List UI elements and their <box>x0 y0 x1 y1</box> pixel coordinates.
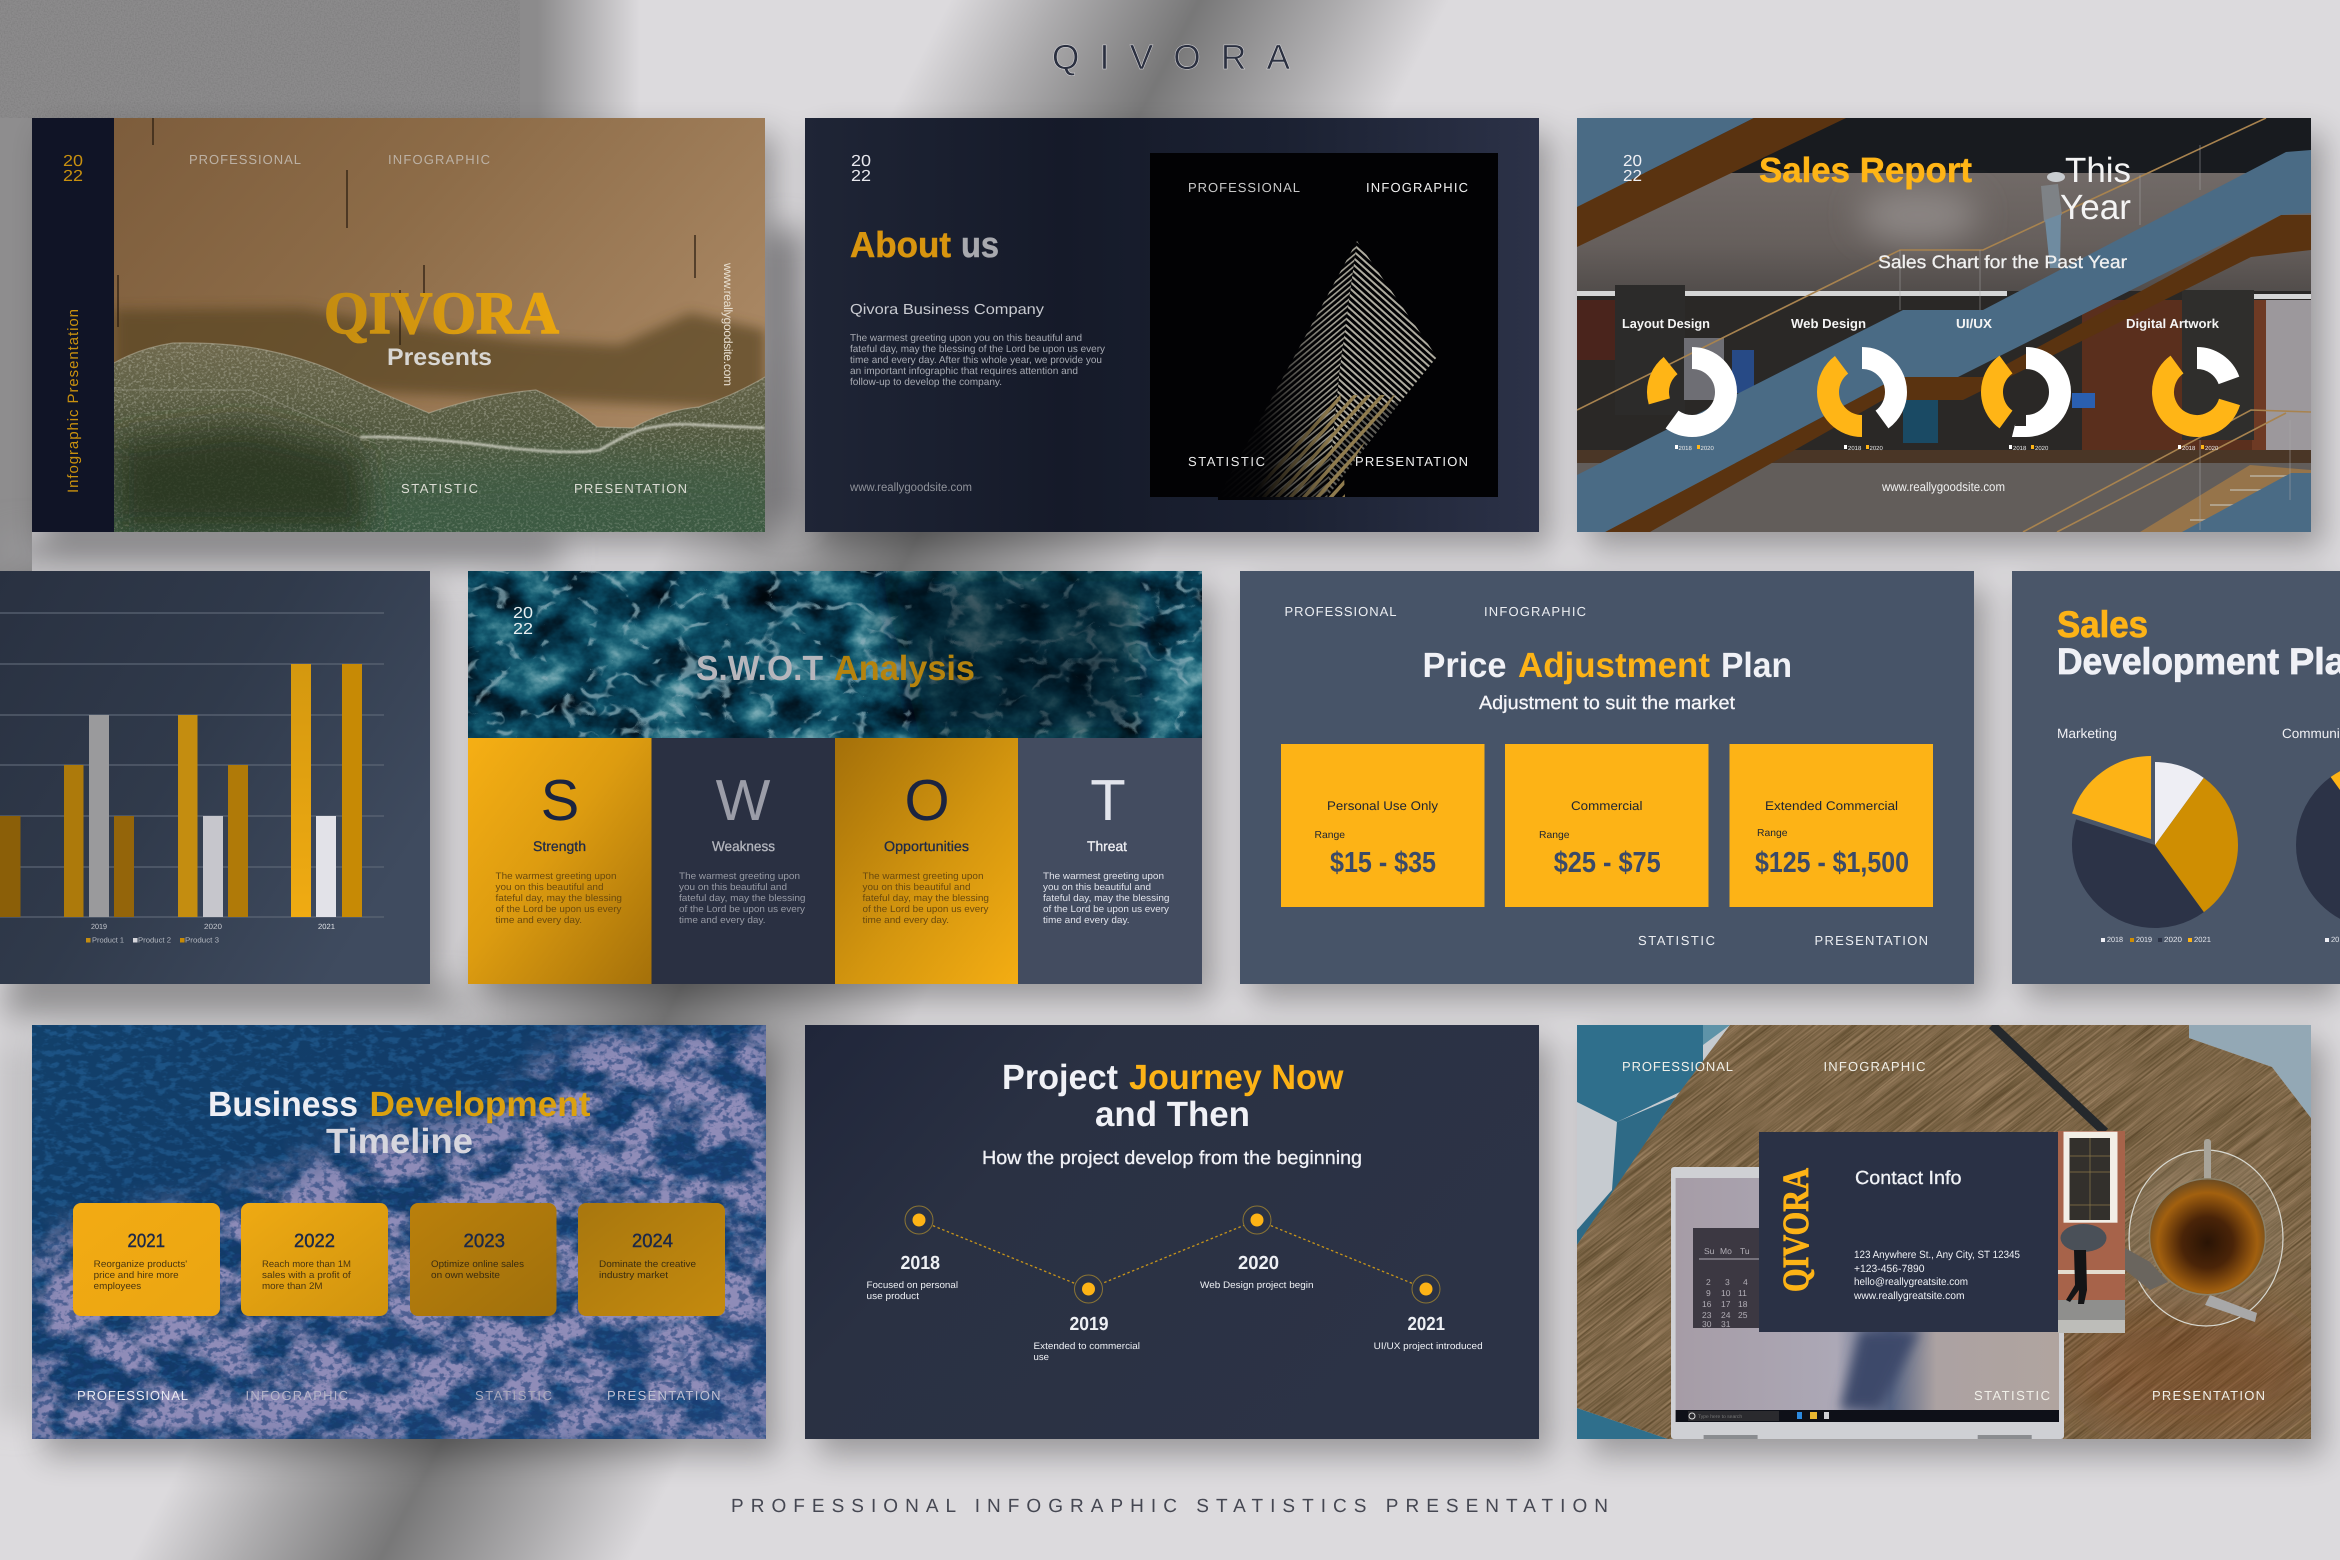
website: www.reallygoodsite.com <box>849 480 972 494</box>
swot labels <box>533 838 1127 854</box>
photo: desk with laptop and tea: 25 <box>1738 1310 1748 1320</box>
website: www.reallygoodsite.com <box>721 262 735 386</box>
pie chart: communication <box>2321 786 2340 904</box>
card: 2021: Reorganize products' <box>94 1259 187 1270</box>
panel labels: PROFESSIONAL <box>1188 180 1300 195</box>
heading <box>1422 646 1792 685</box>
slide: about us <box>805 118 1539 532</box>
heading <box>696 649 975 688</box>
labels: PRESENTATION <box>574 481 687 496</box>
photo panel: building <box>1150 153 1498 500</box>
milestone 2018: Focused on personal <box>866 1280 958 1291</box>
axis labels: 2020 <box>204 922 222 931</box>
heading <box>208 1085 591 1161</box>
photo: foamy ocean <box>32 1025 766 1439</box>
card: commercial <box>1505 744 1708 907</box>
slide background <box>805 118 1539 532</box>
swot letters: S <box>541 768 579 833</box>
slide: swot <box>468 571 1202 984</box>
swot body: opportunities: of the Lord be upon us every <box>862 904 989 915</box>
heading: Price <box>1422 646 1506 685</box>
year: 20 <box>63 153 83 170</box>
labels: STATISTIC <box>475 1388 552 1403</box>
slide background <box>805 1025 1539 1439</box>
contact details: 123 Anywhere St., Any City, ST 12345 <box>1854 1249 2020 1261</box>
swot body: threat: time and every day. <box>1043 915 1130 926</box>
heading <box>2057 604 2340 682</box>
body text: The warmest greeting upon you on this beautiful and <box>850 333 1082 344</box>
labels: PRESENTATION <box>607 1388 720 1403</box>
milestone 2019: use <box>1034 1352 1049 1363</box>
body text: follow-up to develop the company. <box>850 377 1002 388</box>
card: 2022 <box>241 1203 388 1316</box>
heading: Timeline <box>326 1122 473 1161</box>
swot body: threat: of the Lord be upon us every <box>1043 904 1169 915</box>
milestone 2018: use product <box>866 1291 919 1302</box>
swot body: weakness: you on this beautiful and <box>679 882 787 893</box>
contact heading: Contact Info <box>1855 1168 1962 1189</box>
donut legends: 2018 <box>2182 445 2196 452</box>
heading: Development <box>370 1085 591 1124</box>
heading: Analysis <box>834 649 975 688</box>
heading: Project <box>1002 1058 1118 1097</box>
card: 2023: on own website <box>431 1270 500 1281</box>
legend: Product 3 <box>185 936 219 944</box>
chart labels: Digital Artwork <box>2126 316 2220 331</box>
contact details: +123-456-7890 <box>1854 1263 1925 1275</box>
heading: Plan <box>1721 646 1792 685</box>
chart labels: Web Design <box>1791 316 1866 331</box>
top labels: INFOGRAPHIC <box>1484 604 1586 619</box>
year: 20 <box>513 605 533 622</box>
year <box>64 154 82 181</box>
slide: price plan <box>1240 571 1974 984</box>
swot body: threat: fateful day, may the blessing <box>1043 893 1170 904</box>
body text: an important infographic that requires attention and <box>850 366 1078 377</box>
labels: STATISTIC <box>401 481 478 496</box>
milestone 2018 <box>866 1253 958 1302</box>
body text <box>850 333 1105 388</box>
swot body: strength <box>496 871 622 926</box>
top labels <box>1284 604 1586 619</box>
photo: desk with laptop and tea: 17 <box>1721 1299 1731 1309</box>
bottom labels <box>1638 933 1928 948</box>
swot body: weakness: time and every day. <box>679 915 766 926</box>
heading: S.W.O.T <box>696 649 823 688</box>
contact details: www.reallygreatsite.com <box>1853 1290 1965 1302</box>
heading: Adjustment <box>1518 646 1710 685</box>
chart labels: UI/UX <box>1956 316 1992 331</box>
vertical subtitle: Infographic Presentation <box>65 309 82 493</box>
photo: desk with laptop and tea: Type here to search <box>1698 1414 1742 1420</box>
heading: Journey Now <box>1129 1058 1344 1097</box>
photo: desk with laptop and tea: 24 <box>1721 1310 1731 1320</box>
card: 2021: price and hire more <box>94 1270 179 1281</box>
labels: PRESENTATION <box>2152 1388 2265 1403</box>
heading <box>850 230 998 258</box>
card: 2021 <box>73 1203 220 1316</box>
year: 22 <box>1623 168 1642 185</box>
photo: desk with laptop and tea: 9 <box>1706 1288 1711 1298</box>
pie legend: 2020 <box>2164 935 2182 944</box>
axis labels: 2021 <box>318 922 335 931</box>
swot body: threat: you on this beautiful and <box>1043 882 1151 893</box>
labels: INFOGRAPHIC <box>1824 1059 1926 1074</box>
card: personal: Personal Use Only <box>1327 799 1439 813</box>
title: QIVORA <box>1052 38 1291 77</box>
contact details <box>1853 1249 2020 1302</box>
bottom labels: STATISTIC <box>1638 933 1715 948</box>
labels: PROFESSIONAL <box>77 1388 188 1403</box>
slide background <box>1240 571 1974 984</box>
card: 2023: Optimize online sales <box>431 1259 524 1270</box>
labels: PROFESSIONAL <box>189 152 301 167</box>
photo: desk with laptop and tea: Mo <box>1720 1246 1732 1256</box>
card: personal <box>1281 744 1484 907</box>
chart label: marketing: Marketing <box>2057 726 2117 741</box>
company name: Qivora Business Company <box>850 302 1045 318</box>
donut legends: 2020 <box>2035 445 2049 452</box>
donut charts <box>1650 345 2239 439</box>
pie legend: 2018 <box>2107 935 2123 944</box>
year: 22 <box>63 168 83 185</box>
card: 2021: 2021 <box>128 1231 165 1252</box>
photo: desk with laptop and tea: 2 <box>1706 1277 1711 1287</box>
card: personal: $15 - $35 <box>1330 847 1436 879</box>
donut legends: 2020 <box>1700 445 1715 452</box>
milestone 2020: Web Design project begin <box>1200 1280 1314 1291</box>
labels: STATISTIC <box>1974 1388 2050 1403</box>
pie legend: 2019 <box>2136 935 2152 944</box>
subheading: Presents <box>387 344 492 371</box>
photo: aerial beach <box>114 118 765 532</box>
axis labels: 2019 <box>91 922 107 931</box>
slide: timeline <box>32 1025 766 1439</box>
swot body: threat <box>1043 871 1170 926</box>
swot letters: T <box>1090 768 1126 833</box>
labels <box>77 1388 720 1403</box>
swot letters: O <box>904 768 950 833</box>
card: 2024 <box>578 1203 725 1316</box>
swot letters <box>541 768 1126 833</box>
card: commercial: Range <box>1539 830 1570 841</box>
subheading: Sales Chart for the Past Year <box>1878 252 2127 272</box>
photo: desk with laptop and tea: Su <box>1704 1246 1715 1256</box>
donut legends: 2020 <box>2205 445 2219 452</box>
legend: Product 2 <box>138 936 171 944</box>
year <box>1623 153 1642 185</box>
website: www.reallygoodsite.com <box>1881 480 2005 494</box>
year: 22 <box>513 621 533 638</box>
milestone 2020 <box>1200 1253 1314 1291</box>
top labels: PROFESSIONAL <box>1284 604 1396 619</box>
labels: INFOGRAPHIC <box>246 1388 348 1403</box>
swot body: weakness: fateful day, may the blessing <box>679 893 806 904</box>
slide background <box>0 571 430 984</box>
photo: desk with laptop and tea: 23 <box>1702 1310 1712 1320</box>
photo: ocean <box>468 571 1202 738</box>
slide: sales development plan <box>2012 571 2340 984</box>
swot body: strength: The warmest greeting upon <box>496 871 616 882</box>
photo: street <box>2058 1131 2125 1333</box>
swot labels: Threat <box>1087 838 1127 854</box>
slide: cover <box>32 118 765 532</box>
swot body: strength: of the Lord be upon us every <box>496 904 622 915</box>
milestone 2018: 2018 <box>900 1253 940 1274</box>
donut legends <box>1675 445 2219 452</box>
slide: sales report <box>1577 118 2311 532</box>
labels <box>189 152 687 496</box>
heading: us <box>961 224 999 265</box>
swot body: threat: The warmest greeting upon <box>1043 871 1164 882</box>
swot body: weakness: of the Lord be upon us every <box>679 904 805 915</box>
swot body: opportunities: time and every day. <box>862 915 949 926</box>
card: 2024: Dominate the creative <box>599 1259 696 1270</box>
slide background <box>2012 571 2340 984</box>
panel: weakness <box>652 738 835 984</box>
swot body: strength: fateful day, may the blessing <box>496 893 622 904</box>
year <box>852 154 870 181</box>
swot labels: Opportunities <box>884 838 969 854</box>
photo: desk with laptop and tea <box>1577 1025 2320 1439</box>
pie legend 2 <box>2325 935 2340 944</box>
card: extended commercial <box>1730 744 1933 907</box>
card: 2024: 2024 <box>632 1231 673 1252</box>
pie legend <box>2101 935 2211 944</box>
slide: bar chart <box>0 571 430 984</box>
swot body: strength: time and every day. <box>496 915 582 926</box>
panel: threat <box>1018 738 1202 984</box>
swot body: weakness: The warmest greeting upon <box>679 871 800 882</box>
heading: Year <box>2060 188 2131 227</box>
swot body: opportunities: fateful day, may the blessing <box>862 893 989 904</box>
photo: desk with laptop and tea: 4 <box>1743 1277 1748 1287</box>
donut legends: 2020 <box>1870 445 1884 452</box>
bottom labels: PRESENTATION <box>1814 933 1928 948</box>
card: 2023 <box>410 1203 556 1316</box>
slide: contact <box>1577 1025 2320 1439</box>
milestone 2019 <box>1034 1314 1140 1363</box>
card: 2023: 2023 <box>464 1231 505 1252</box>
heading: and Then <box>1095 1095 1250 1134</box>
donut legends: 2018 <box>2013 445 2027 452</box>
slide: project journey <box>805 1025 1539 1439</box>
swot labels: Weakness <box>712 838 775 854</box>
card: extended commercial: $125 - $1,500 <box>1755 847 1909 879</box>
milestone 2021 <box>1374 1314 1483 1352</box>
labels: INFOGRAPHIC <box>388 152 490 167</box>
panel labels: INFOGRAPHIC <box>1366 180 1468 195</box>
panel labels: PRESENTATION <box>1355 454 1468 469</box>
legend: Product 1 <box>92 936 124 944</box>
card: commercial: Commercial <box>1571 799 1642 813</box>
axis labels <box>91 922 335 931</box>
milestone 2019: 2019 <box>1070 1314 1108 1335</box>
panel: opportunities <box>835 738 1018 984</box>
timeline nodes <box>905 1206 1440 1303</box>
card: extended commercial: Extended Commercial <box>1765 799 1898 813</box>
card: extended commercial: Range <box>1757 828 1788 839</box>
card: 2022: sales with a profit of <box>262 1270 351 1281</box>
swot body: opportunities: The warmest greeting upon <box>862 871 984 882</box>
heading <box>1002 1058 1344 1134</box>
swot body: strength: you on this beautiful and <box>496 882 604 893</box>
swot body: opportunities <box>862 871 989 926</box>
swot letters: W <box>716 768 771 833</box>
photo: desk with laptop and tea: 11 <box>1738 1288 1747 1298</box>
card: personal: Range <box>1314 830 1345 841</box>
photo: desk with laptop and tea: 10 <box>1721 1288 1731 1298</box>
heading: Business <box>208 1085 358 1124</box>
body text: fateful day, may the blessing of the Lord be upon us every <box>850 344 1105 355</box>
heading: Sales Report <box>1759 151 1972 190</box>
photo: desk with laptop and tea: 18 <box>1738 1299 1748 1309</box>
card: 2022: 2022 <box>294 1231 335 1252</box>
year: 20 <box>851 153 871 170</box>
card: commercial: $25 - $75 <box>1554 847 1661 879</box>
contact details: hello@reallygreatsite.com <box>1854 1276 1968 1288</box>
contact card <box>1759 1132 2058 1332</box>
milestone 2021: 2021 <box>1408 1314 1445 1335</box>
photo: desk with laptop and tea: 31 <box>1721 1319 1731 1329</box>
card: 2022: more than 2M <box>262 1281 323 1292</box>
heading: Development <box>2057 641 2279 682</box>
panel labels <box>1188 180 1468 469</box>
year: 20 <box>1623 153 1642 170</box>
panel labels: STATISTIC <box>1188 454 1265 469</box>
year <box>513 605 533 638</box>
labels: PROFESSIONAL <box>1622 1059 1733 1074</box>
chart labels: Layout Design <box>1622 316 1710 331</box>
donut legends: 2018 <box>1678 445 1693 452</box>
photo: desk with laptop and tea: 3 <box>1725 1277 1730 1287</box>
swot labels: Strength <box>533 838 586 854</box>
card: 2021: employees <box>94 1281 141 1292</box>
photo: escalators <box>1577 118 2311 532</box>
panel: strength <box>468 738 652 984</box>
bar chart <box>0 664 362 917</box>
heading: QIVORA <box>324 280 559 346</box>
labels <box>1622 1059 2265 1403</box>
heading: This <box>2065 151 2131 190</box>
photo: desk with laptop and tea: Tu <box>1740 1246 1750 1256</box>
donut legends: 2018 <box>1848 445 1862 452</box>
legend <box>86 936 219 944</box>
heading: About <box>850 224 951 265</box>
card: 2022: Reach more than 1M <box>262 1259 351 1270</box>
pie legend: 2021 <box>2194 935 2211 944</box>
chart labels <box>1622 316 2220 331</box>
vertical logo: QIVORA <box>1776 1168 1817 1292</box>
swot body: opportunities: you on this beautiful and <box>862 882 970 893</box>
card: 2024: industry market <box>599 1270 668 1281</box>
milestone 2019: Extended to commercial <box>1034 1341 1140 1352</box>
year: 22 <box>851 168 871 185</box>
photo: desk with laptop and tea: 16 <box>1702 1299 1712 1309</box>
milestone 2020: 2020 <box>1238 1253 1279 1274</box>
subheading: Adjustment to suit the market <box>1479 693 1736 714</box>
photo: desk with laptop and tea: 30 <box>1702 1319 1712 1329</box>
milestone 2021: UI/UX project introduced <box>1374 1341 1483 1352</box>
body text: time and every day. After this whole year, we provide you <box>850 355 1102 366</box>
subheading: How the project develop from the beginning <box>982 1148 1362 1169</box>
swot body: weakness <box>679 871 806 926</box>
sidebar <box>32 118 114 532</box>
heading <box>1759 151 2131 227</box>
timeline path <box>919 1220 1426 1289</box>
heading: Sales <box>2057 604 2148 645</box>
footer: PROFESSIONAL INFOGRAPHIC STATISTICS PRESENTATION <box>731 1496 1608 1517</box>
pie chart: marketing <box>2097 787 2213 903</box>
